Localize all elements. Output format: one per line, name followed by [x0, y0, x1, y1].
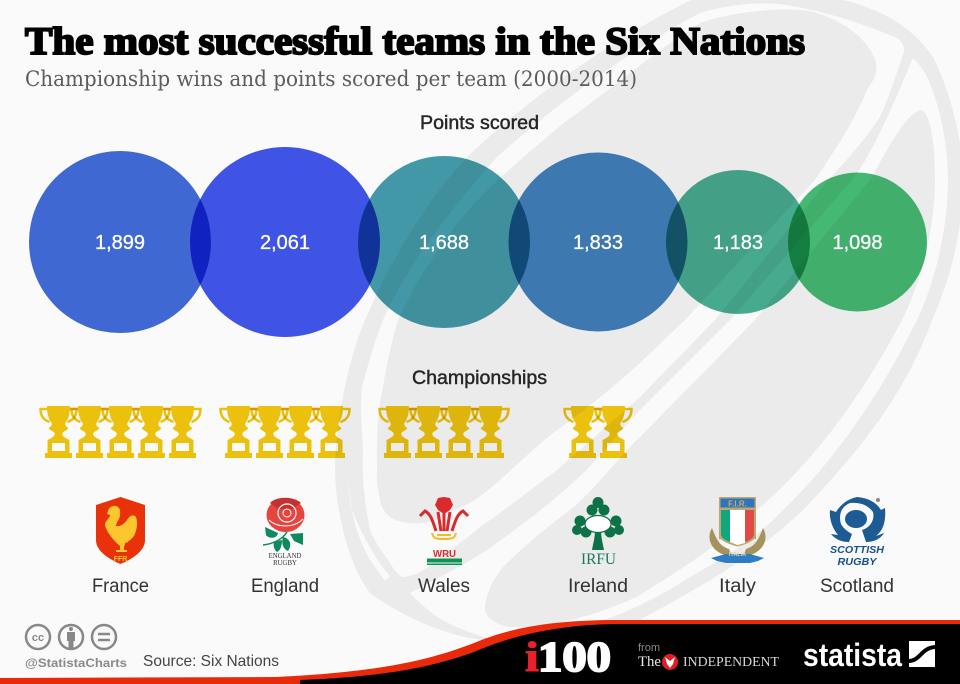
heading: points scored: Points scored	[420, 112, 539, 134]
team names	[92, 576, 894, 597]
bubble values: 1,098	[832, 232, 883, 254]
logo: France: FFR	[114, 556, 127, 563]
logo: Ireland	[572, 497, 624, 568]
trophies: Ireland	[564, 406, 632, 458]
logo: i100: i	[525, 635, 539, 681]
logo: Wales: WRU	[433, 548, 456, 560]
subtitle: Championship wins and points scored per team (2000-2014)	[25, 67, 637, 91]
bubble values	[95, 232, 883, 254]
bubble: Italy	[666, 170, 810, 314]
logo: France	[96, 497, 145, 564]
logo: England: RUGBY	[273, 560, 297, 567]
team names: Wales	[418, 576, 470, 597]
team names: England	[251, 576, 319, 597]
credit: @StatistaCharts	[25, 656, 127, 670]
bubble values: 1,183	[713, 232, 763, 254]
trophies: France	[40, 406, 200, 458]
logo: Scotland: RUGBY	[838, 557, 878, 568]
logo: Italy	[709, 497, 766, 563]
bubble: Ireland	[508, 152, 688, 332]
heading: championships: Championships	[412, 367, 547, 389]
bubble values: 1,688	[419, 232, 469, 254]
trophies: Wales	[380, 406, 508, 458]
bubble: Scotland	[788, 172, 927, 312]
team names: Scotland	[820, 576, 894, 597]
logo: The Independent: from	[638, 642, 660, 654]
logo: i100: 100	[538, 635, 611, 681]
rugby ball watermark	[335, 0, 960, 650]
team names: Italy	[719, 576, 757, 597]
logo: England	[263, 498, 304, 567]
bubble: England	[190, 147, 380, 337]
icons: creative commons: cc	[32, 632, 44, 644]
source: Source: Six Nations	[143, 653, 279, 670]
bubble: France	[29, 151, 211, 333]
logo: Italy: F.I.R.	[728, 500, 747, 508]
bubble values: 2,061	[260, 232, 310, 254]
logo: Italy: ITALIA	[729, 552, 746, 558]
logo: England: ENGLAND	[269, 553, 302, 560]
bubble values: 1,899	[95, 232, 145, 254]
logo: statista: statista	[803, 637, 902, 673]
logo: The Independent	[638, 642, 779, 670]
title: The most successful teams in the Six Nations	[25, 20, 805, 63]
team names: Ireland	[568, 576, 628, 597]
bubble chart: points scored	[29, 147, 927, 337]
logo: Ireland: IRFU	[581, 551, 616, 568]
logo: The Independent: The	[638, 654, 661, 670]
logo: Scotland	[830, 497, 885, 568]
trophies: England	[220, 406, 350, 458]
logo: Wales	[420, 497, 468, 565]
footer wave	[0, 620, 960, 684]
logo: Scotland: SCOTTISH	[830, 545, 885, 556]
bubble values: 1,833	[573, 232, 623, 254]
logo: The Independent: INDEPENDENT	[683, 655, 779, 670]
team names: France	[92, 576, 149, 597]
bubble: Wales	[358, 156, 530, 328]
icons: creative commons	[26, 625, 116, 649]
